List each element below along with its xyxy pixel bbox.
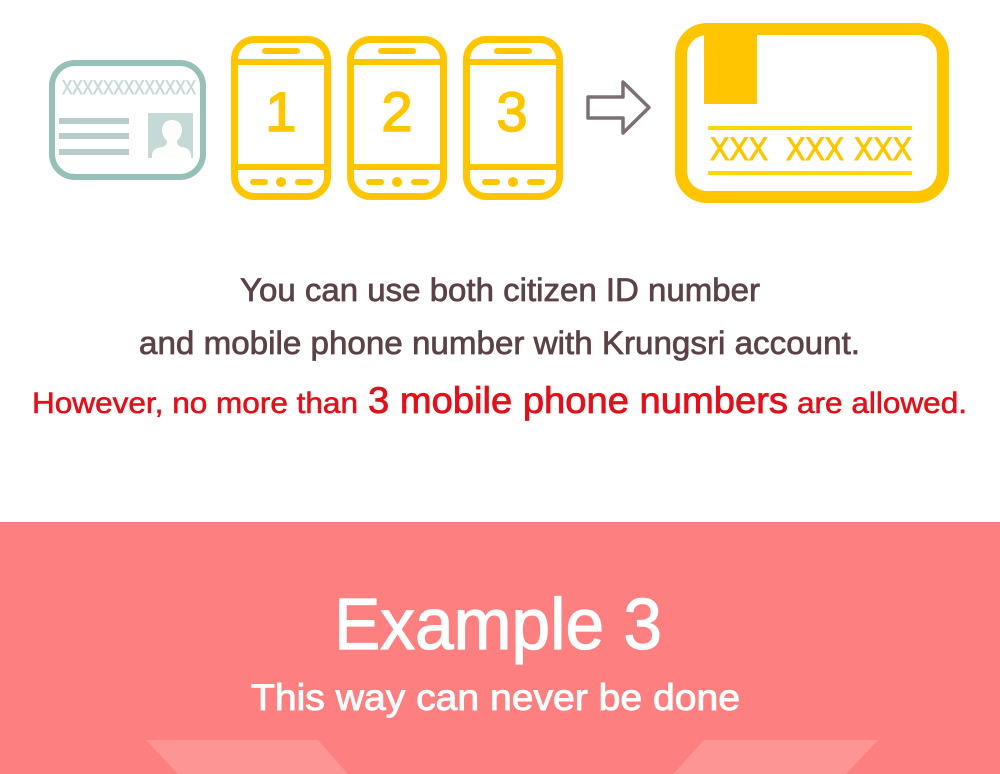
text block: explanation: are allowed. [797,387,967,420]
icon: phone 3: 3 [496,80,528,143]
heading: Example 3 [334,585,662,665]
icon: account card: XXX [854,131,912,167]
subheading: This way can never be done [251,677,740,718]
icon: phone 1: 1 [265,80,297,143]
icon: phone 3 [466,40,560,196]
text block: explanation: You can use both citizen ID number [240,272,760,308]
icon: account card: XXX [710,131,768,167]
text block: explanation [32,272,967,421]
icon: citizen ID card [52,63,203,177]
ribbon: right [673,740,878,774]
text block: explanation: and mobile phone number with Krungsri account. [139,325,860,361]
arrow [588,82,649,133]
icon: citizen ID card: XXXXXXXXXXXXX [62,78,196,99]
icon: phone 1 [234,40,328,196]
icon: phone 2 [350,40,444,196]
ribbon: left [146,740,348,774]
text block: explanation: 3 mobile phone numbers [368,380,788,421]
icon: account card [681,29,943,197]
text block: explanation: However, no more than [32,387,358,420]
icon: phone 2: 2 [381,80,413,143]
icon: account card: XXX [786,131,844,167]
